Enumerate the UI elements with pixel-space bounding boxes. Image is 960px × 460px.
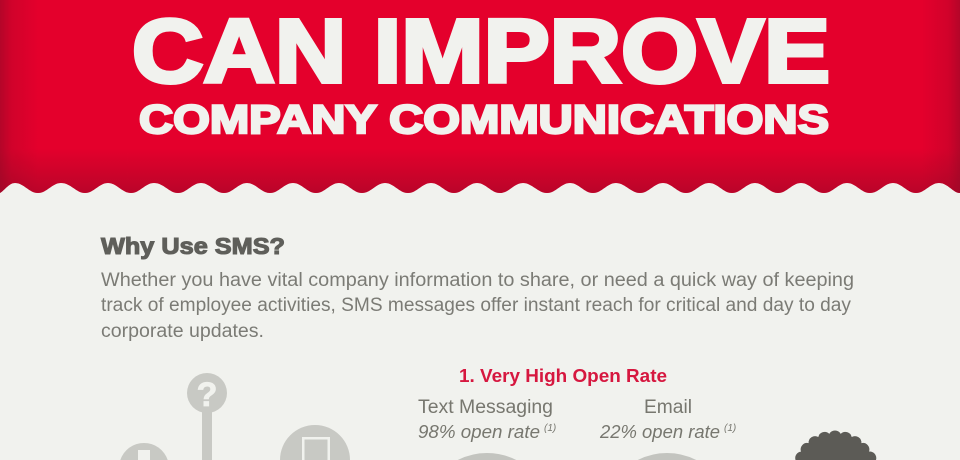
icon: exclamation circle	[120, 443, 168, 460]
heading: 1. Very High Open Rate: 1. Very High Open Rate	[459, 366, 667, 386]
label: text messaging open rate: Text Messaging	[418, 397, 553, 418]
text block: why use SMS intro: track of employee activities, SMS messages offer instant reach for critical and day to day	[101, 295, 851, 316]
text block: why use SMS intro: corporate updates.	[101, 321, 264, 342]
chart: email circle	[638, 453, 696, 460]
icon: question mark pin	[187, 373, 227, 460]
label: text messaging open rate	[418, 397, 556, 442]
label: email open rate: (1)	[724, 423, 736, 434]
label: email open rate: 22% open rate	[599, 422, 720, 442]
heading: Why Use SMS?: Why Use SMS?	[101, 233, 285, 259]
icon: question mark pin: ?	[197, 376, 217, 414]
title: COMPANY COMMUNICATIONS: COMPANY COMMUNICATIONS	[139, 98, 829, 142]
label: email open rate: Email	[644, 397, 692, 418]
icon: dark scalloped badge	[795, 431, 876, 460]
label: text messaging open rate: (1)	[544, 423, 556, 434]
icon: phone circle	[280, 425, 350, 460]
label: email open rate	[599, 397, 736, 442]
chart: text messaging circle	[458, 453, 516, 460]
label: text messaging open rate: 98% open rate	[418, 422, 540, 442]
title: CAN IMPROVE: CAN IMPROVE	[132, 2, 830, 102]
panel: red scalloped header	[0, 0, 960, 195]
text block: why use SMS intro	[101, 270, 854, 342]
text block: why use SMS intro: Whether you have vital company information to share, or need a quick way of keeping	[101, 270, 854, 291]
